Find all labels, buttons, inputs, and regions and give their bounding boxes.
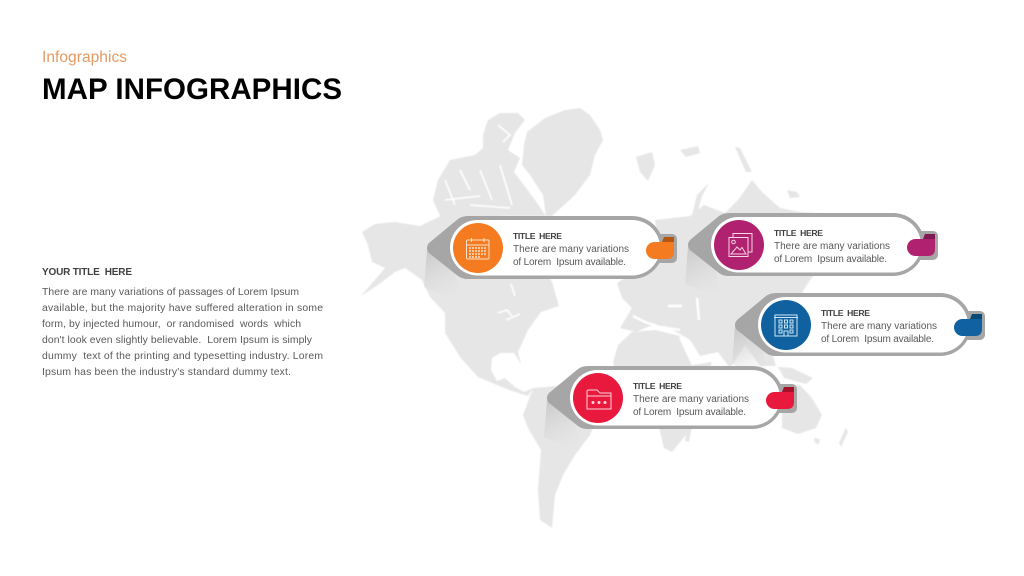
- tip shadow: [732, 327, 768, 379]
- canadian arctic islands: [433, 113, 546, 216]
- circle: [573, 373, 623, 423]
- pill outline and pointer: [547, 366, 784, 429]
- callout: red folder: [544, 366, 797, 452]
- left block paragraph: available, but the majority have suffered alteration in some: [42, 303, 323, 314]
- callout text: of Lorem Ipsum available.: [774, 254, 887, 265]
- tab: [646, 237, 674, 259]
- callout text: There are many variations: [633, 394, 749, 405]
- tip shadow: [685, 247, 721, 299]
- tip shadow: [544, 400, 580, 452]
- left block paragraph: There are many variations of passages of Lorem Ipsum: [42, 287, 299, 298]
- main title: MAP INFOGRAPHICS: [42, 73, 342, 106]
- pill body: [758, 297, 968, 352]
- tab backing: [650, 234, 677, 263]
- callout text: There are many variations: [513, 244, 629, 255]
- pill body: [711, 217, 921, 272]
- callout: orange calendar: [424, 216, 677, 302]
- circle: [453, 223, 503, 273]
- south america: [523, 385, 600, 528]
- callout text: TITLE HERE: [821, 308, 870, 318]
- tab: [907, 234, 935, 256]
- new zealand, tasmania, madagascar: [685, 425, 848, 447]
- callout text: [513, 231, 629, 268]
- callout: blue building: [732, 293, 985, 379]
- callout text: There are many variations: [774, 241, 890, 252]
- north america: [361, 210, 559, 396]
- tab: [766, 387, 794, 409]
- pill outline and pointer: [688, 213, 925, 276]
- greenland: [522, 108, 603, 216]
- africa: [613, 330, 712, 452]
- tip shadow: [424, 250, 460, 302]
- pill body: [450, 220, 660, 276]
- left block paragraph: Ipsum has been the industry's standard dummy text.: [42, 367, 291, 378]
- pill outline and pointer: [427, 216, 664, 279]
- small heading: Infographics: Infographics: [42, 49, 127, 66]
- arctic islands and uk: [636, 146, 800, 215]
- australia: [782, 385, 822, 434]
- tab backing: [958, 311, 985, 340]
- map water details: [445, 125, 699, 374]
- tab: [954, 314, 982, 336]
- callout text: [821, 308, 937, 345]
- circle: [761, 300, 811, 350]
- callout text: There are many variations: [821, 321, 937, 332]
- left block paragraph: [42, 287, 323, 378]
- world map: [361, 108, 850, 528]
- callout text: of Lorem Ipsum available.: [821, 334, 934, 345]
- left block paragraph: dummy text of the printing and typesetting industry. Lorem: [42, 351, 323, 362]
- callout text: [774, 228, 890, 265]
- icon: picture: [729, 234, 752, 256]
- callout text: of Lorem Ipsum available.: [513, 257, 626, 268]
- callout text: TITLE HERE: [633, 381, 682, 391]
- callout text: TITLE HERE: [774, 228, 823, 238]
- icon: folder: [587, 390, 611, 409]
- left block paragraph: form, by injected humour, or randomised words which: [42, 319, 301, 330]
- pill outline and pointer: [735, 293, 972, 356]
- pill body: [570, 370, 780, 426]
- southeast asia islands: [778, 367, 813, 384]
- callout text: [633, 381, 749, 418]
- left block paragraph: don't look even slightly believable. Lorem Ipsum is simply: [42, 335, 313, 346]
- left block heading: YOUR TITLE HERE: [42, 267, 132, 278]
- left text block: [42, 267, 323, 378]
- tab backing: [770, 384, 797, 413]
- callout: magenta image: [685, 213, 938, 299]
- eurasia: [617, 180, 850, 368]
- icon: building: [774, 315, 798, 336]
- callout text: TITLE HERE: [513, 231, 562, 241]
- tab backing: [911, 231, 938, 260]
- icon: calendar: [466, 238, 489, 259]
- circle: [714, 220, 764, 270]
- callout text: of Lorem Ipsum available.: [633, 407, 746, 418]
